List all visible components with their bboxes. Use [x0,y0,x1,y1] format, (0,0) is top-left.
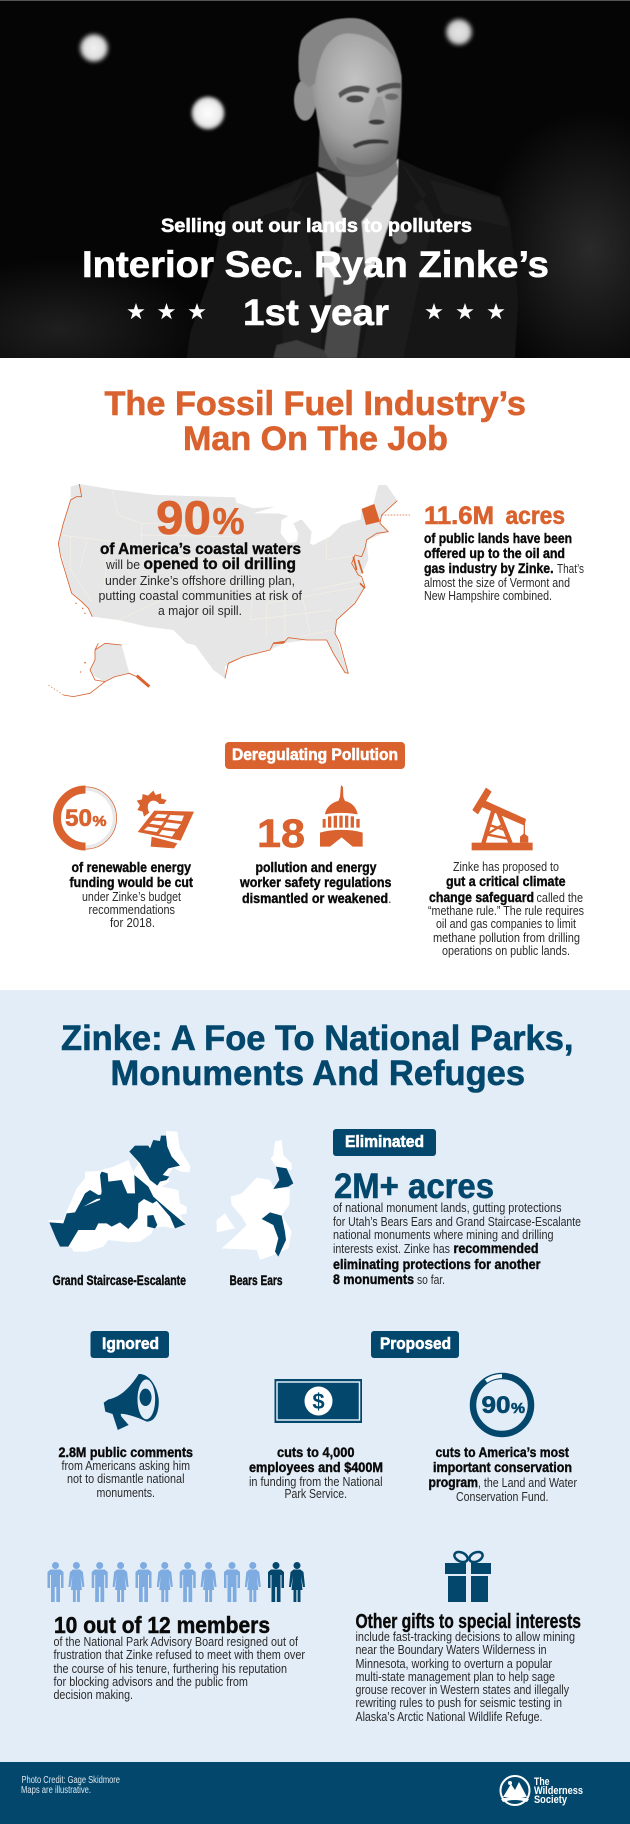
heading: national parks section: Zinke: A Foe To National Parks, [61,1019,574,1058]
stat: 11.6M acres: acres [506,502,565,530]
icon: capitol [320,785,363,847]
header title: Interior Sec. Ryan Zinke’s [82,244,549,285]
stat: 11.6M acres: of public lands have been [424,530,572,546]
icon: right stars [425,303,505,319]
column: park service cuts text: Park Service. [284,1486,347,1501]
column: park service cuts text: cuts to 4,000 [277,1444,355,1460]
column: park service cuts text [249,1444,383,1501]
icon: megaphone [104,1374,159,1430]
column: regulations text: worker safety regulations [239,874,392,890]
map: Bears Ears [217,1140,293,1260]
column: regulations text [239,859,392,906]
stat: 2M+ acres: so far. [417,1272,445,1287]
stat: 10 out of 12 members: 10 out of 12 members [54,1612,270,1638]
map: United States with orange coastlines [48,484,410,697]
badge: Ignored: Ignored [102,1334,159,1353]
column: conservation fund text [428,1444,578,1504]
column: renewable energy text: recommendations [88,902,175,917]
stat: 2M+ acres: national monuments where mining and drilling [333,1227,554,1242]
stat: 10 out of 12 members: the course of his tenure, furthering his reputation [54,1661,287,1676]
column: renewable energy text: of renewable energy [72,859,191,875]
icon: solar panel [137,791,194,848]
badge: Proposed: Proposed [380,1334,451,1353]
logo: The Wilderness Society: Society [534,1794,568,1806]
stat: other gifts to special interests: near the Boundary Waters Wilderness in [356,1642,546,1657]
stat: 2M+ acres: 2M+ acres [334,1167,494,1206]
footer bar [0,1762,630,1824]
ring chart: 50%: % [92,813,106,830]
stat: 10 out of 12 members [54,1612,306,1702]
stat: 90% of coastal waters: putting coastal communities at risk of [98,588,302,603]
stat: 2M+ acres [333,1167,581,1287]
column: methane rule text: called the [536,890,583,905]
stat: 10 out of 12 members: decision making. [54,1687,133,1702]
stat: 10 out of 12 members: frustration that Zinke refused to meet with them over [54,1647,306,1662]
column: renewable energy text: for 2018. [110,915,155,930]
column: conservation fund text: Conservation Fund. [456,1489,548,1504]
stat: other gifts to special interests: multi-state management plan to help sage [356,1669,555,1684]
header title second line: 1st year [243,292,389,333]
stat: 2M+ acres: recommended [454,1240,538,1256]
column: renewable energy text: under Zinke’s budget [82,889,181,904]
page background: white section [0,0,630,990]
icon: dollar bill: $ [312,1389,325,1414]
column: conservation fund text: , the Land and Water [478,1475,578,1490]
column: conservation fund text: important conservation [433,1459,572,1475]
stat: 2M+ acres: eliminating protections for another [333,1256,541,1272]
column: public comments text: not to dismantle national [67,1471,185,1486]
stat: 2M+ acres: 8 monuments [333,1271,414,1287]
stat: 11.6M acres: almost the size of Vermont and [424,575,570,590]
column: methane rule text: change safeguard [429,889,534,905]
stat: 90% of coastal waters: 90 [156,491,211,544]
column: park service cuts text: in funding from the National [249,1474,383,1489]
stat: 11.6M acres: That’s [557,561,584,576]
heading: fossil fuel section: Man On The Job [183,420,448,458]
icon: left stars [127,303,206,319]
column: methane rule text: Zinke has proposed to [453,859,559,874]
column: regulations text: pollution and energy [256,859,377,875]
column: methane rule text: methane pollution from drilling [433,930,580,945]
stat: 2M+ acres: of national monument lands, gutting protections [333,1200,562,1215]
badge: Eliminated: Eliminated [345,1132,424,1151]
column: conservation fund text: cuts to America’s most [436,1444,569,1460]
badge: Deregulating Pollution: Deregulating Pollution [232,745,398,764]
badge: Ignored [90,1331,169,1358]
icon: gift box [445,1550,491,1602]
map label: Bears Ears: Bears Ears [230,1272,283,1288]
logo: The Wilderness Society: The [534,1776,550,1788]
leader line [382,514,410,516]
column: public comments text: monuments. [96,1485,155,1500]
Vermont and New Hampshire highlight [362,504,380,525]
map: Grand Staircase-Escalante [48,1131,191,1252]
heading: fossil fuel section [104,385,526,458]
badge: Deregulating Pollution [225,742,405,769]
stat: other gifts to special interests: Minnesota, working to overturn a popular [356,1656,553,1671]
icon: row of twelve people [48,1562,305,1602]
ring chart: 50%: 50 [65,805,92,832]
heading: fossil fuel section: The Fossil Fuel Industry’s [104,385,526,423]
stat: 11.6M acres: offered up to the oil and [424,545,565,561]
footer credits [21,1775,120,1796]
stat: 90% of coastal waters: of America’s coastal waters [100,541,301,558]
column: public comments text: from Americans asking him [62,1458,190,1473]
stat: 18 regulations: 18 [257,812,305,856]
column: methane rule text [428,859,584,958]
stat: 2M+ acres: interests exist. Zinke has [333,1241,450,1256]
column: methane rule text: operations on public lands. [442,943,570,958]
stat: 11.6M acres: gas industry by Zinke. [424,560,554,576]
icon: dollar bill [274,1379,362,1423]
badge: Proposed [371,1331,459,1358]
column: methane rule text: “methane rule.” The rule requires [428,903,584,918]
heading: national parks section [61,1019,574,1093]
column: public comments text: 2.8M public comments [58,1444,193,1460]
logo: The Wilderness Society [500,1776,583,1806]
column: methane rule text: oil and gas companies to limit [436,916,576,931]
header photo: Ryan Zinke portrait [0,0,630,358]
ring chart: 50% [54,787,116,849]
column: methane rule text: gut a critical climate [446,873,566,889]
stat: other gifts to special interests [356,1611,581,1724]
column: renewable energy text [70,859,193,930]
column: park service cuts text: employees and $400M [249,1459,383,1475]
stat: 90% of coastal waters: opened to oil drilling [144,556,296,573]
stat: 90% of coastal waters: under Zinke’s offshore drilling plan, [105,573,295,588]
stat: 11.6M acres: New Hampshire combined. [424,588,552,603]
stat: other gifts to special interests: Alaska’s Arctic National Wildlife Refuge. [356,1709,542,1724]
icon: oil pump jack [472,788,533,850]
page background: blue section [0,990,630,1762]
stat: 90% of coastal waters [98,491,302,618]
stat: 10 out of 12 members: of the National Park Advisory Board resigned out of [54,1634,298,1649]
heading: national parks section: Monuments And Refuges [110,1054,525,1093]
stat: 90% of coastal waters: a major oil spill. [158,603,242,618]
stat: 90% of coastal waters: will be [105,557,140,572]
stat: other gifts to special interests: grouse recover in Western states and illegally [356,1682,569,1697]
footer credits: Photo Credit: Gage Skidmore [22,1775,120,1786]
column: public comments text [58,1444,193,1500]
map label: Grand Staircase-Escalante: Grand Staircase-Escalante [52,1272,186,1288]
stat: 90% of coastal waters: % [212,501,244,542]
ring chart: 90%: 90 [482,1392,510,1419]
column: regulations text: . [388,891,392,906]
column: renewable energy text: funding would be cut [70,874,193,890]
stat: 10 out of 12 members: for blocking advisors and the public from [54,1674,248,1689]
column: regulations text: dismantled or weakened [242,890,388,906]
column: conservation fund text: program [428,1474,478,1490]
ring chart: 90%: % [511,1400,525,1417]
stat: other gifts to special interests: rewriting rules to push for seismic testing in [356,1695,562,1710]
logo: The Wilderness Society: Wilderness [534,1785,583,1797]
badge: Eliminated [333,1129,436,1156]
stat: 11.6M acres [424,502,584,603]
footer credits: Maps are illustrative. [21,1785,91,1796]
header subtitle: Selling out our lands to polluters [161,216,472,237]
stat: other gifts to special interests: include fast-tracking decisions to allow mining [356,1629,575,1644]
stat: 11.6M acres: 11.6M [424,502,494,530]
ring chart: 90% [473,1376,531,1434]
